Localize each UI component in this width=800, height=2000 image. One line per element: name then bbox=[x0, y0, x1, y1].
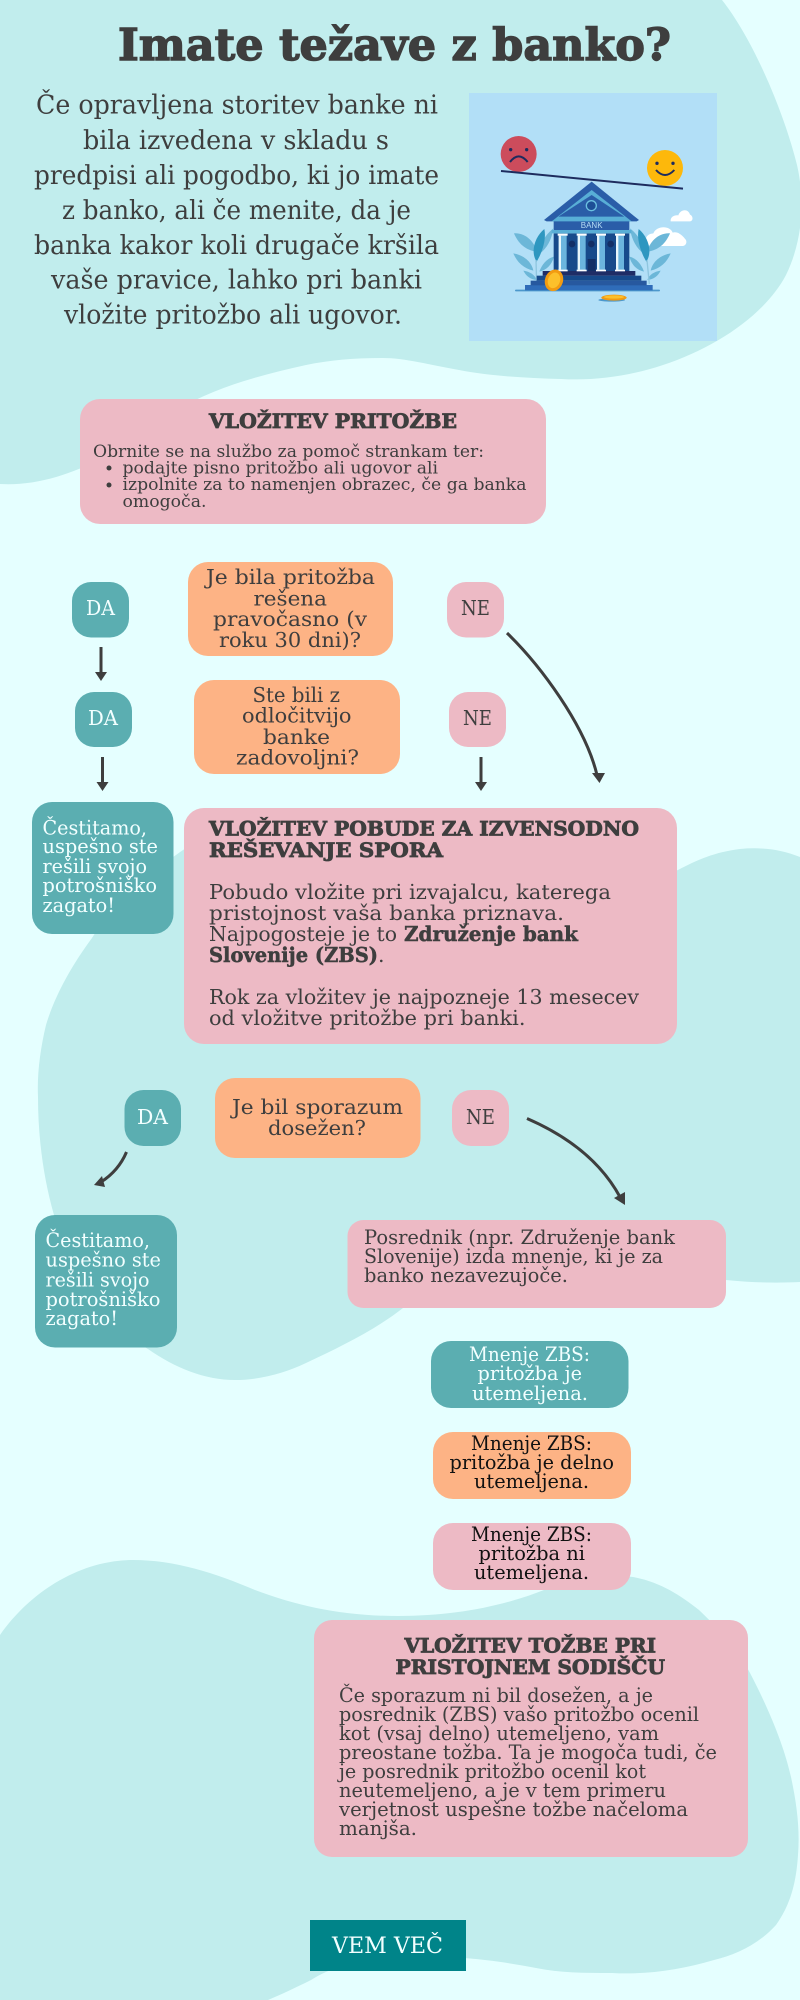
intro text: bila izvedena v skladu s bbox=[83, 126, 389, 156]
panel heading: VLOŽITEV POBUDE ZA IZVENSODNO bbox=[208, 816, 639, 840]
badge: NE 3 bbox=[452, 1090, 509, 1146]
question: zadovoljni: banke bbox=[263, 725, 330, 749]
badge: NE 2 bbox=[449, 692, 506, 747]
panel: izvensodno reševanje bbox=[184, 808, 677, 1044]
button: vem več: VEM VEČ bbox=[331, 1932, 443, 1959]
callout: čestitamo 2: potrošniško bbox=[46, 1287, 160, 1311]
panel text: izpolnite za to namenjen obrazec, če ga banka bbox=[122, 475, 526, 495]
panel text: Združenje bank bbox=[404, 922, 579, 946]
intro text: vaše pravice, lahko pri banki bbox=[50, 266, 422, 296]
panel text: pristojnost vaša banka priznava. bbox=[209, 901, 564, 925]
panel heading bbox=[396, 1634, 665, 1679]
title: Imate težave z banko? bbox=[118, 20, 671, 71]
panel text: Najpogosteje je to bbox=[209, 922, 397, 946]
button: vem več bbox=[310, 1920, 466, 1971]
arrow: DA 2 down bbox=[96, 757, 108, 791]
box: mnenje utemeljena: utemeljena. bbox=[472, 1381, 588, 1405]
arrow: NE 1 curved bbox=[507, 633, 605, 783]
panel text: Obrnite se na službo za pomoč strankam ter: bbox=[93, 442, 484, 462]
panel text: Rok za vložitev je najpozneje 13 mesecev bbox=[209, 985, 639, 1009]
panel text: kot (vsaj delno) utemeljeno, vam bbox=[339, 1721, 659, 1745]
box: mnenje delno utemeljena: pritožba je delno bbox=[450, 1450, 614, 1474]
box: posrednik: banko nezavezujoče. bbox=[364, 1263, 568, 1287]
panel text: Če sporazum ni bil dosežen, a je bbox=[339, 1682, 653, 1707]
intro text: predpisi ali pogodbo, ki jo imate bbox=[34, 161, 439, 191]
panel: vložitev tožbe bbox=[314, 1620, 748, 1857]
illustration: bank with balance scale: BANK bbox=[581, 221, 603, 230]
question: zadovoljni bbox=[194, 680, 400, 774]
intro text: banka kakor koli drugače kršila bbox=[34, 231, 439, 261]
box: posrednik: Slovenije) izda mnenje, ki je za bbox=[364, 1244, 663, 1268]
intro text: Če opravljena storitev banke ni bbox=[36, 89, 438, 121]
box: posrednik bbox=[348, 1220, 726, 1308]
panel text: manjša. bbox=[339, 1816, 417, 1840]
illustration: bank with balance scale bbox=[469, 93, 717, 341]
callout: čestitamo 1: zagato! bbox=[42, 893, 115, 917]
panel text: od vložitve pritožbe pri banki. bbox=[209, 1006, 526, 1030]
badge: DA 2 bbox=[75, 692, 132, 747]
box: mnenje utemeljena bbox=[431, 1341, 628, 1408]
callout: čestitamo 2: zagato! bbox=[46, 1306, 118, 1330]
panel text: neutemeljeno, a je v tem primeru bbox=[339, 1778, 666, 1802]
box: mnenje ni utemeljena: pritožba ni bbox=[478, 1541, 585, 1565]
panel text: posrednik (ZBS) vašo pritožbo ocenil bbox=[339, 1702, 699, 1726]
box: mnenje delno utemeljena bbox=[433, 1431, 631, 1499]
panel text: . bbox=[378, 943, 385, 967]
panel text: Pobudo vložite pri izvajalcu, katerega bbox=[209, 880, 611, 904]
box: mnenje utemeljena: pritožba je bbox=[478, 1361, 582, 1385]
question: pravočasno: roku 30 dni)? bbox=[219, 628, 361, 652]
question: zadovoljni: zadovoljni? bbox=[236, 746, 359, 770]
question: pravočasno bbox=[188, 562, 393, 656]
box: mnenje utemeljena: Mnenje ZBS: bbox=[469, 1342, 590, 1366]
badge: NE 3: NE bbox=[466, 1105, 495, 1129]
question: pravočasno: Je bila pritožba bbox=[204, 565, 375, 589]
badge: NE 1: NE bbox=[461, 596, 490, 620]
panel heading: VLOŽITEV PRITOŽBE bbox=[208, 409, 457, 433]
box: posrednik: Posrednik (npr. Združenje bank bbox=[364, 1225, 676, 1249]
intro text: vložite pritožbo ali ugovor. bbox=[63, 301, 402, 331]
arrow: DA 3 curved bbox=[94, 1152, 126, 1187]
callout: čestitamo 2: Čestitamo, bbox=[46, 1227, 150, 1252]
panel heading bbox=[208, 816, 639, 862]
badge: NE 1 bbox=[447, 582, 504, 638]
panel text: je posrednik pritožbo ocenil kot bbox=[337, 1759, 646, 1783]
question: zadovoljni: Ste bili z bbox=[252, 683, 340, 707]
callout: čestitamo 2: rešili svojo bbox=[46, 1268, 150, 1292]
badge: DA 3 bbox=[124, 1090, 181, 1146]
panel text bbox=[337, 1682, 717, 1840]
question: pravočasno: rešena bbox=[254, 586, 327, 610]
callout: čestitamo 2: uspešno ste bbox=[46, 1248, 161, 1272]
callout: čestitamo 1 bbox=[32, 802, 174, 934]
arrow: NE 2 down bbox=[475, 757, 487, 791]
panel text: podajte pisno pritožbo ali ugovor ali bbox=[122, 458, 439, 478]
badge: DA 1: DA bbox=[86, 596, 115, 620]
intro text bbox=[34, 89, 439, 331]
question: sporazum: Je bil sporazum bbox=[230, 1095, 403, 1119]
panel text: preostane tožba. Ta je mogoča tudi, če bbox=[339, 1740, 717, 1764]
panel text: omogoča. bbox=[122, 492, 206, 512]
box: mnenje ni utemeljena: Mnenje ZBS: bbox=[471, 1522, 592, 1546]
box: mnenje ni utemeljena: utemeljena. bbox=[474, 1560, 589, 1584]
callout: čestitamo 2 bbox=[35, 1215, 177, 1348]
panel heading: VLOŽITEV TOŽBE PRI bbox=[403, 1634, 656, 1658]
panel heading: REŠEVANJE SPORA bbox=[209, 837, 444, 862]
question: zadovoljni: odločitvijo bbox=[242, 704, 352, 728]
box: mnenje ni utemeljena bbox=[433, 1522, 631, 1590]
panel heading: PRISTOJNEM SODIŠČU bbox=[396, 1654, 665, 1679]
box: mnenje delno utemeljena: utemeljena. bbox=[474, 1469, 589, 1493]
question: sporazum: dosežen? bbox=[268, 1116, 366, 1140]
panel text bbox=[93, 442, 526, 512]
callout: čestitamo 1: Čestitamo, bbox=[42, 814, 147, 839]
badge: DA 3: DA bbox=[137, 1105, 168, 1129]
callout: čestitamo 1: uspešno ste bbox=[42, 834, 158, 858]
question: pravočasno: pravočasno (v bbox=[213, 607, 367, 631]
panel: vložitev pritožbe bbox=[80, 399, 546, 524]
panel text: Slovenije (ZBS) bbox=[209, 943, 378, 967]
box: mnenje delno utemeljena: Mnenje ZBS: bbox=[471, 1431, 592, 1455]
intro text: z banko, ali če menite, da je bbox=[62, 196, 411, 226]
panel text: verjetnost uspešne tožbe načeloma bbox=[338, 1797, 688, 1821]
question: sporazum bbox=[215, 1078, 420, 1158]
badge: DA 2: DA bbox=[88, 706, 118, 730]
arrow: NE 3 curved bbox=[527, 1118, 625, 1205]
badge: DA 1 bbox=[72, 582, 129, 638]
panel text bbox=[209, 880, 639, 1030]
badge: NE 2: NE bbox=[463, 706, 492, 730]
callout: čestitamo 1: potrošniško bbox=[42, 873, 157, 897]
arrow: DA 1 down bbox=[95, 647, 107, 681]
callout: čestitamo 1: rešili svojo bbox=[42, 854, 147, 878]
